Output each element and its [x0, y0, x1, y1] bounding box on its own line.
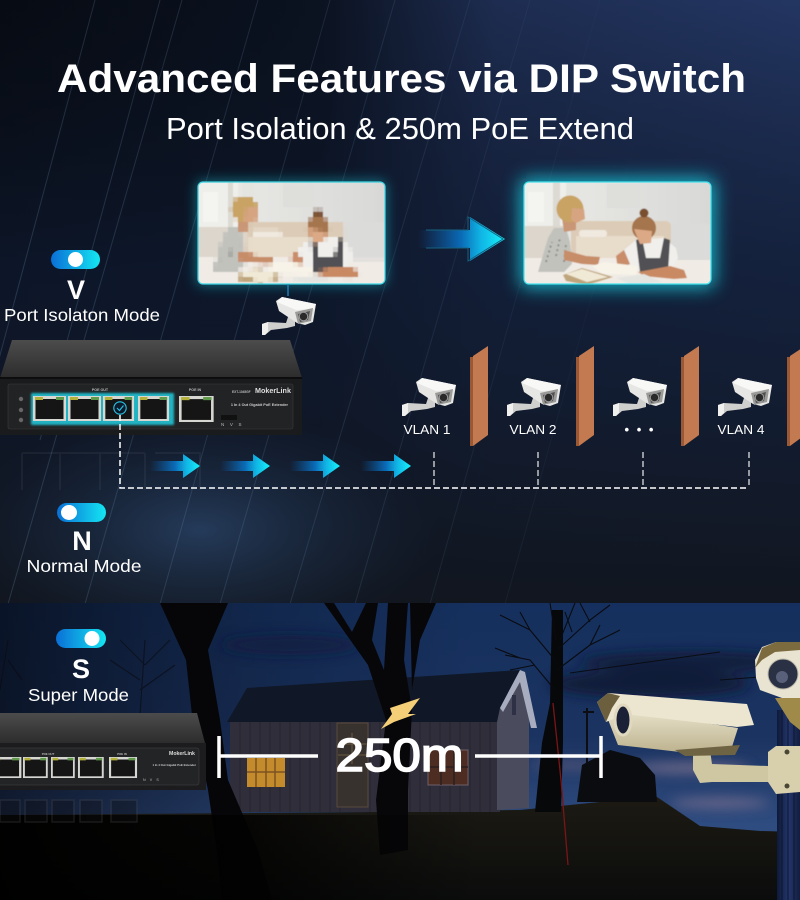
icon: check — [114, 402, 126, 414]
lens — [615, 705, 631, 735]
far-left trees — [0, 640, 175, 715]
tree: right — [495, 603, 620, 812]
switch: super mode: 1 In 4 Out Gigabit PoE Extender — [152, 763, 197, 767]
highlight: PoE Out box — [31, 393, 174, 425]
switch reflection — [22, 453, 200, 490]
label: DIP switch: N V S — [221, 422, 244, 427]
utility pole — [583, 708, 594, 800]
camera: large bullet — [597, 693, 768, 783]
panel: night scene — [0, 603, 800, 900]
gable side — [497, 672, 529, 810]
VLAN 4: VLAN 4 — [718, 422, 764, 437]
camera: mount block — [768, 746, 800, 794]
ellipsis camera — [613, 378, 667, 437]
tree: middle — [324, 603, 436, 855]
label: Port Isolaton Mode: Port Isolaton Mode — [4, 305, 160, 325]
red pole — [553, 703, 568, 865]
bush — [577, 750, 657, 802]
label: N: N — [72, 526, 92, 556]
label: Normal Mode: Normal Mode — [26, 556, 142, 576]
switch: main extender — [0, 340, 302, 435]
subtitle: Port Isolation & 250m PoE Extend — [166, 111, 634, 146]
icon: top camera — [262, 284, 316, 335]
house — [227, 670, 537, 812]
clouds — [220, 635, 800, 808]
port: PoE In — [179, 396, 214, 422]
label: Super Mode: Super Mode — [28, 685, 129, 705]
title: Advanced Features via DIP Switch — [57, 57, 746, 101]
VLAN 2: VLAN 2 — [510, 422, 556, 437]
toggle: S mode — [56, 629, 106, 648]
dark fade — [0, 815, 800, 900]
VLAN 4 — [718, 378, 772, 437]
arrow: blur to clear — [418, 217, 505, 261]
switch reflection — [0, 800, 137, 822]
toggle: V mode — [51, 250, 100, 269]
panel: front — [8, 384, 293, 429]
icon: lightning — [381, 698, 420, 729]
tree: left — [160, 603, 272, 900]
dashed connector — [120, 415, 749, 488]
body — [607, 712, 738, 753]
camera: upper dome — [755, 642, 800, 730]
measure: 250m — [219, 729, 601, 781]
window dim — [428, 750, 468, 785]
pole — [777, 710, 800, 900]
VLAN 1: VLAN 1 — [404, 422, 450, 437]
measure: 250m: 250m — [336, 729, 464, 781]
switch: super mode — [0, 713, 206, 790]
VLAN 2 — [507, 378, 561, 437]
switch: super mode: MokerLink — [169, 751, 195, 757]
ellipsis camera: • • • — [625, 422, 655, 437]
housing top — [597, 693, 754, 727]
door — [337, 723, 368, 807]
arm — [693, 750, 768, 783]
power line — [570, 652, 760, 680]
VLAN 1 — [402, 378, 456, 437]
toggle: N mode — [57, 503, 106, 522]
panel: clear photo — [520, 178, 715, 288]
window lit — [247, 758, 285, 787]
label: V: V — [67, 275, 85, 305]
switch: super mode: POE IN — [117, 752, 127, 756]
panel: pixelated photo — [196, 180, 387, 286]
roof — [227, 670, 520, 722]
switch: super mode: POE OUT — [42, 752, 55, 756]
wall — [230, 722, 500, 812]
background — [0, 0, 800, 650]
arrows: data flow — [150, 454, 411, 478]
label: S: S — [72, 654, 90, 684]
switch: super mode: N V S — [143, 778, 160, 782]
walls — [470, 346, 800, 446]
ground — [0, 797, 800, 900]
